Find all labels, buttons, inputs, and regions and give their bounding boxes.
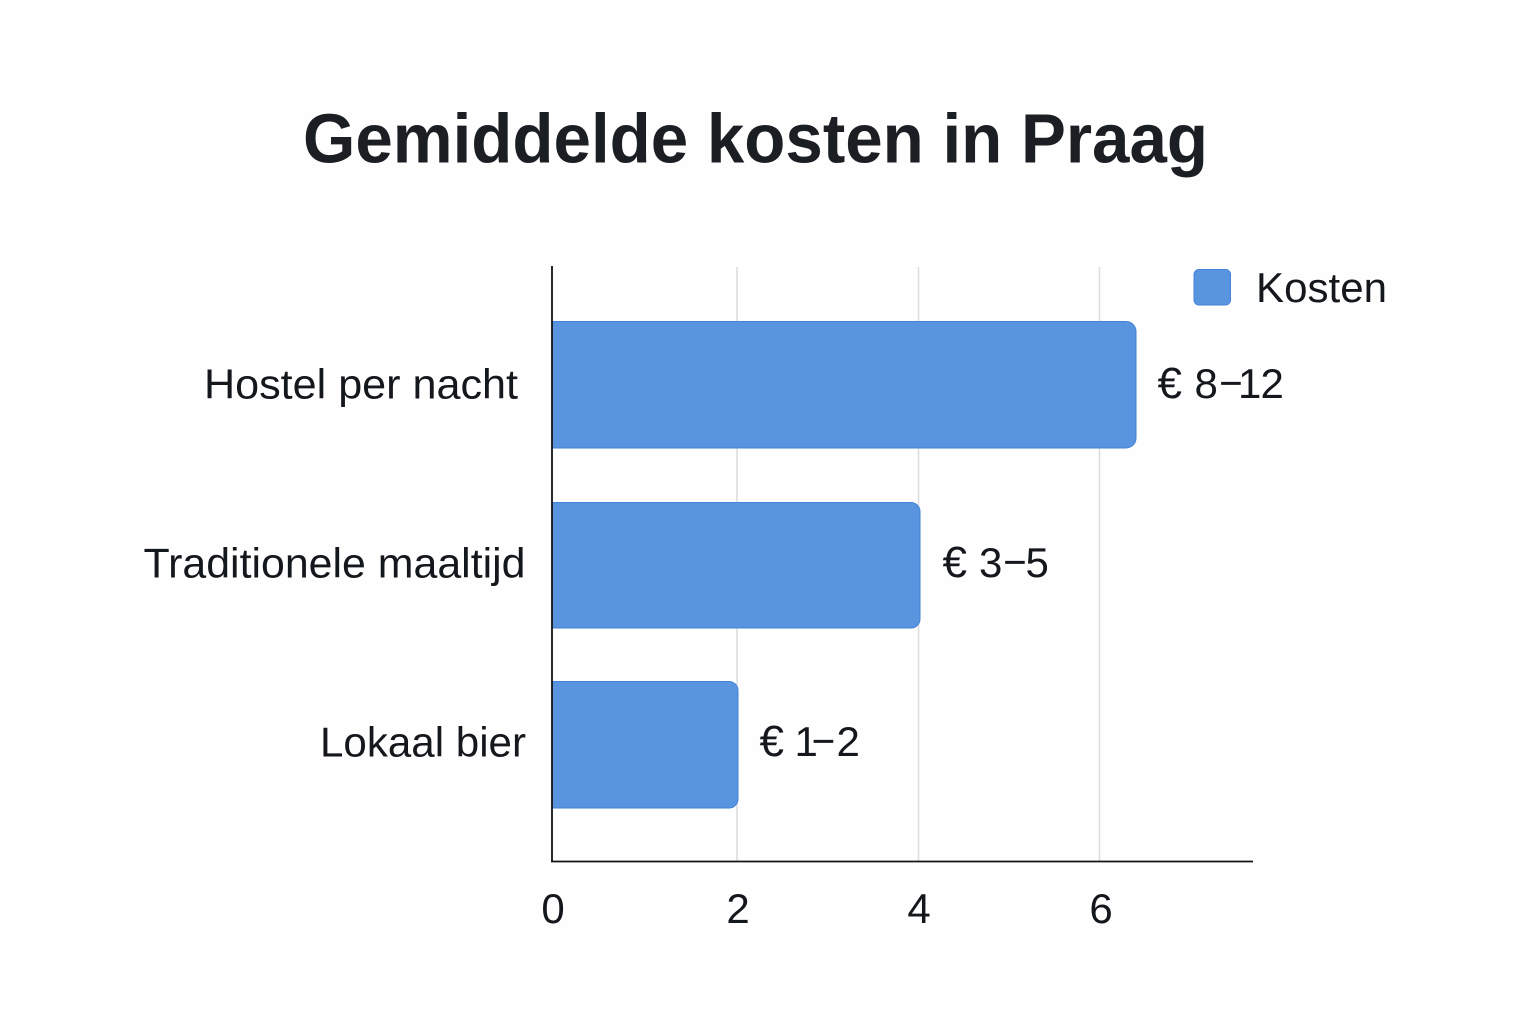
bar: Lokaal bier <box>552 682 738 808</box>
value label: Hostel: € <box>1158 359 1182 408</box>
value label: bier: 1 <box>794 718 818 765</box>
legend <box>1194 264 1387 311</box>
chart plot area <box>551 266 1253 862</box>
x axis tick labels: 4 <box>907 885 931 932</box>
value label: maaltijd: 3 <box>979 539 1002 586</box>
category label: Hostel per nacht: Hostel per nacht <box>204 360 518 408</box>
value label: Hostel: 8 <box>1194 360 1218 407</box>
x axis tick labels <box>541 885 1113 932</box>
value label: bier: € <box>760 717 784 766</box>
category label: Traditionele maaltijd: Traditionele maaltijd <box>144 540 526 586</box>
bar: Traditionele maaltijd <box>552 502 920 628</box>
x axis tick labels: 0 <box>541 885 565 932</box>
value label: bier: – <box>814 720 833 758</box>
x axis tick labels: 6 <box>1089 885 1113 932</box>
legend label: Kosten <box>1256 264 1387 311</box>
value label: Hostel: 1 <box>1238 360 1261 407</box>
category label: Lokaal bier: Lokaal bier <box>320 718 526 766</box>
value label: maaltijd: € <box>942 538 967 587</box>
value label: maaltijd: 5 <box>1026 539 1049 586</box>
legend swatch <box>1194 270 1230 305</box>
value label: Hostel: 2 <box>1260 360 1284 407</box>
value label: bier: 2 <box>836 718 860 765</box>
value label: maaltijd: – <box>1006 541 1024 579</box>
value label: Hostel: – <box>1222 362 1240 400</box>
bar: Hostel per nacht <box>552 322 1136 448</box>
x axis tick labels: 2 <box>726 885 750 932</box>
title: Gemiddelde kosten in Praag <box>303 100 1208 178</box>
